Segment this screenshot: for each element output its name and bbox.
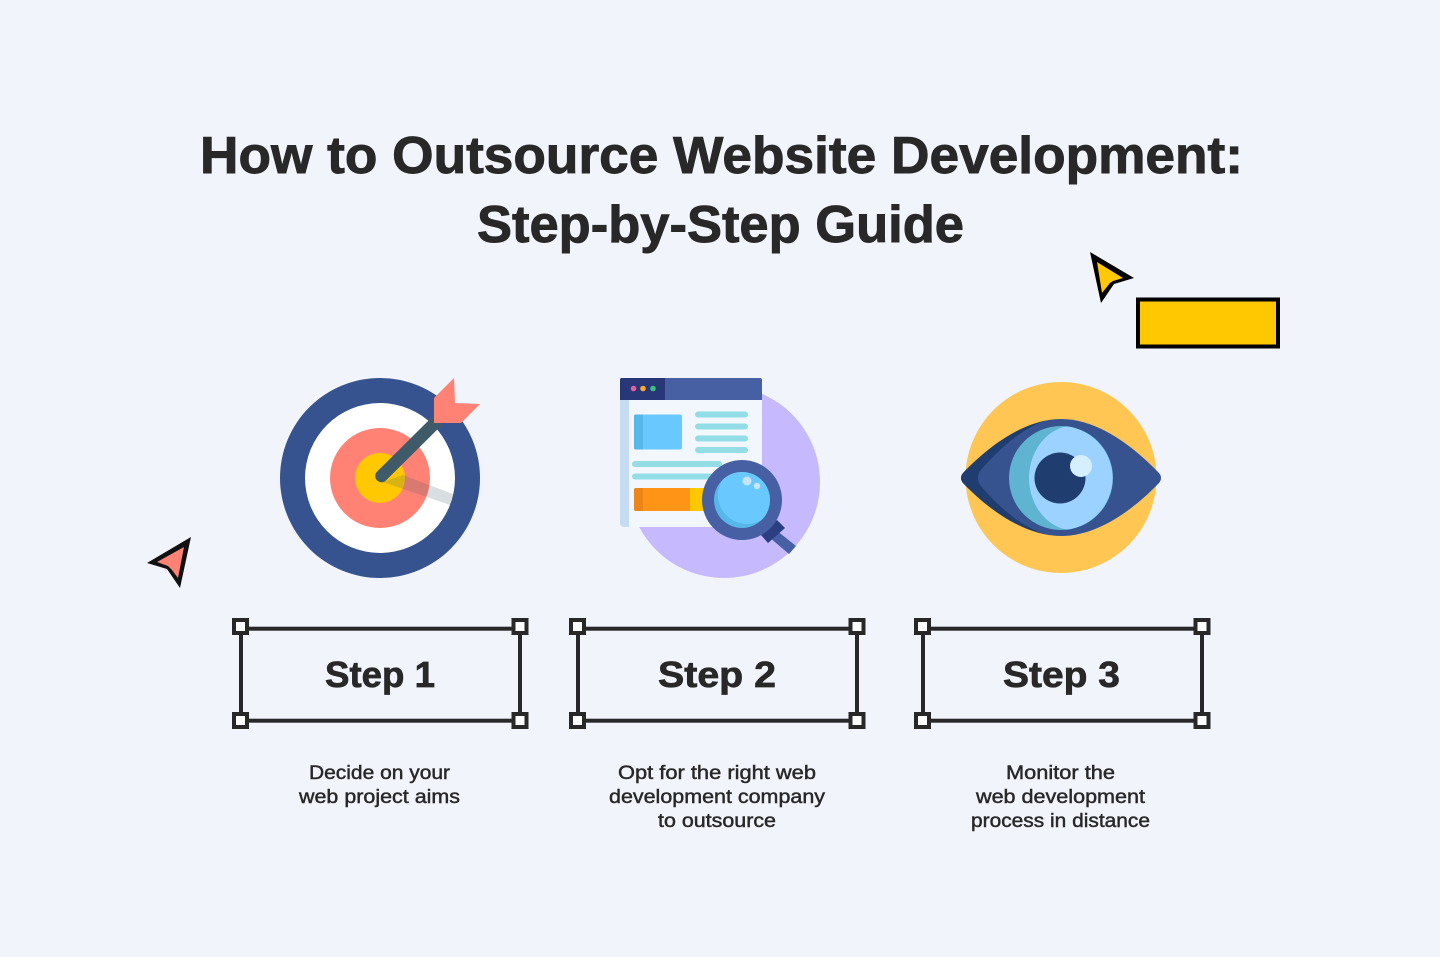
title: Step-by-Step Guide [477,196,964,254]
arrow shaft [382,418,440,476]
browser page [620,400,762,527]
step 2 description: development company [609,787,826,808]
step 2 box [571,620,864,727]
image block [634,414,682,450]
decorative yellow rectangle [1138,300,1278,346]
step 3 description [971,763,1150,832]
icon: eye [961,382,1161,573]
step 1 description: Decide on your [309,763,451,784]
step 3 description: process in distance [971,811,1150,832]
step 3 description: Monitor the [1006,763,1115,784]
arrow shadow [383,475,453,505]
browser header [620,378,762,400]
eye shape [961,419,1161,536]
title [200,127,1243,254]
step 2 description: to outsource [658,811,776,832]
arrow feather [434,378,480,423]
icon: coral cursor arrow [147,537,191,588]
step 1 description: web project aims [298,787,460,808]
icon: browser window with magnifier [620,378,820,578]
icon: yellow cursor arrow [1090,252,1134,303]
step 2 description [609,763,826,832]
step 2 description: Opt for the right web [618,763,816,784]
icon: target with arrow [280,378,480,578]
text lines [632,412,748,480]
highlight [1070,455,1092,477]
step 1 box: Step 1 [325,654,435,695]
step 3 description: web development [975,787,1146,808]
step 3 box: Step 3 [1003,654,1120,695]
magnifier [769,530,796,554]
iris [1009,426,1113,530]
step 1 box [234,620,526,727]
orange bar [634,488,710,511]
step 2 box: Step 2 [658,654,776,695]
pupil [1034,452,1086,504]
title: How to Outsource Website Development: [200,127,1243,185]
step 1 description [298,763,460,808]
step 3 box [916,620,1208,727]
